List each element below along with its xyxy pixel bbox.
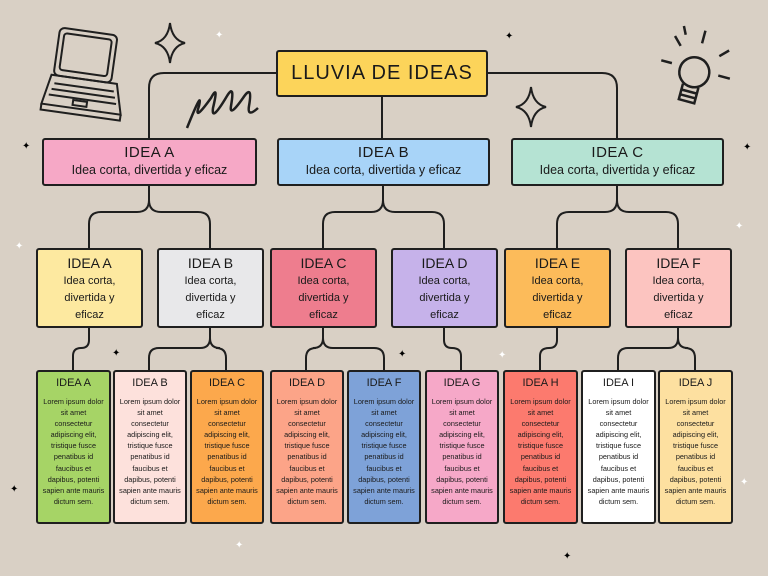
level2: B: IDEA B xyxy=(188,255,233,271)
level3: F: penatibus id xyxy=(364,452,404,461)
decorative stars: ✦ xyxy=(22,141,30,152)
level3: G: consectetur xyxy=(443,419,481,428)
level3: G: penatibus id xyxy=(442,452,482,461)
decorative stars: ✦ xyxy=(505,31,513,42)
decorative stars: ✦ xyxy=(498,350,506,361)
level3: H: sapien ante mauris xyxy=(510,486,571,495)
level3: C: dictum sem. xyxy=(207,497,247,506)
level3: A: faucibus et xyxy=(56,464,91,473)
level3: A: IDEA A xyxy=(56,377,91,389)
level2: B xyxy=(157,248,264,328)
level3: J: sapien ante mauris xyxy=(665,486,726,495)
level3: H: tristique fusce xyxy=(518,441,563,450)
level2: D: Idea corta, xyxy=(418,275,470,287)
level3: B: adipiscing elit, xyxy=(127,430,173,439)
level3: F: tristique fusce xyxy=(361,441,407,450)
icon: lightbulb xyxy=(661,26,730,105)
decorative stars: ✦ xyxy=(215,30,223,41)
level3: G: IDEA G xyxy=(444,377,480,389)
level1: IDEA C xyxy=(511,138,724,186)
level3: F xyxy=(347,370,421,524)
level3: B: consectetur xyxy=(131,419,169,428)
level3: F: Lorem ipsum dolor xyxy=(354,397,414,406)
decorative stars: ✦ xyxy=(235,540,243,551)
level3: D: consectetur xyxy=(288,419,326,428)
level2: A: IDEA A xyxy=(67,255,112,271)
level2: D xyxy=(391,248,498,328)
level3: D xyxy=(270,370,344,524)
level3: F: sit amet xyxy=(371,408,397,417)
level3: G: dapibus, potenti xyxy=(436,475,488,484)
icon: sparkle xyxy=(154,22,186,64)
decorative stars: ✦ xyxy=(563,551,571,562)
level3: H: penatibus id xyxy=(521,452,560,461)
level3: I: dapibus, potenti xyxy=(593,475,644,484)
level3: I: penatibus id xyxy=(599,452,638,461)
level3: H: consectetur xyxy=(522,419,559,428)
level3: J: adipiscing elit, xyxy=(673,430,718,439)
level3: I: sapien ante mauris xyxy=(588,486,649,495)
level2: C xyxy=(270,248,377,328)
level2: B: divertida y xyxy=(185,292,236,304)
level3: F: sapien ante mauris xyxy=(353,486,415,495)
level3: I: Lorem ipsum dolor xyxy=(588,397,649,406)
level3: A xyxy=(36,370,111,524)
level2: C: Idea corta, xyxy=(298,275,349,287)
level2: E xyxy=(504,248,611,328)
level1: IDEA A: IDEA A xyxy=(124,144,175,161)
level3: J: Lorem ipsum dolor xyxy=(665,397,726,406)
level1: IDEA B xyxy=(277,138,490,186)
level3: C: dapibus, potenti xyxy=(201,475,253,484)
level3: F: dictum sem. xyxy=(364,497,404,506)
level3: A: sapien ante mauris xyxy=(43,486,104,495)
level3: I: IDEA I xyxy=(603,377,634,389)
level3: H: IDEA H xyxy=(522,377,559,389)
level3: I: adipiscing elit, xyxy=(596,430,641,439)
level2: F: IDEA F xyxy=(656,255,701,271)
level3: A: penatibus id xyxy=(54,452,93,461)
level3: I: sit amet xyxy=(606,408,631,417)
level3: H: Lorem ipsum dolor xyxy=(510,397,571,406)
level3: C: faucibus et xyxy=(209,464,245,473)
level2: E: Idea corta, xyxy=(532,275,583,287)
level3: I: tristique fusce xyxy=(596,441,641,450)
level3: A: sit amet xyxy=(61,408,86,417)
level3: C: sapien ante mauris xyxy=(196,486,258,495)
level3: G: tristique fusce xyxy=(439,441,485,450)
level1: IDEA C: Idea corta, divertida y eficaz xyxy=(540,163,695,177)
level3: F: faucibus et xyxy=(366,464,402,473)
level3: A: dapibus, potenti xyxy=(48,475,99,484)
decorative stars: ✦ xyxy=(112,348,120,359)
level3: C: tristique fusce xyxy=(204,441,250,450)
icon: laptop xyxy=(40,27,122,122)
level3: B: penatibus id xyxy=(130,452,170,461)
level3: D: dapibus, potenti xyxy=(281,475,333,484)
level3: D: IDEA D xyxy=(289,377,325,389)
level3: I: consectetur xyxy=(600,419,637,428)
level3: J: dapibus, potenti xyxy=(670,475,721,484)
level3: G xyxy=(425,370,499,524)
level1: IDEA A: Idea corta, divertida y eficaz xyxy=(72,163,227,177)
level3: G: adipiscing elit, xyxy=(439,430,485,439)
level2: D: IDEA D xyxy=(422,255,467,271)
level2: B: Idea corta, xyxy=(184,275,236,287)
level3: J: sit amet xyxy=(683,408,708,417)
level3: G: Lorem ipsum dolor xyxy=(432,397,492,406)
level3: G: sit amet xyxy=(449,408,475,417)
level3: C: sit amet xyxy=(214,408,240,417)
level1: IDEA C: IDEA C xyxy=(591,144,644,161)
level3: D: penatibus id xyxy=(287,452,327,461)
level3: A: consectetur xyxy=(55,419,92,428)
level3: D: tristique fusce xyxy=(284,441,330,450)
level3: C: Lorem ipsum dolor xyxy=(197,397,257,406)
level3: J xyxy=(658,370,733,524)
level3: B: sit amet xyxy=(137,408,163,417)
level2: D: divertida y xyxy=(419,292,470,304)
icon: squiggle xyxy=(186,90,259,128)
level3: I xyxy=(581,370,656,524)
level3: D: adipiscing elit, xyxy=(284,430,330,439)
level3: B: sapien ante mauris xyxy=(119,486,181,495)
decorative stars: ✦ xyxy=(743,142,751,153)
level2: F xyxy=(625,248,732,328)
level2: F: divertida y xyxy=(653,292,704,304)
level3: J: consectetur xyxy=(677,419,714,428)
level3: C xyxy=(190,370,264,524)
level3: D: faucibus et xyxy=(289,464,325,473)
level3: J: faucibus et xyxy=(678,464,713,473)
level2: C: IDEA C xyxy=(301,255,346,271)
icon: sparkle 2 xyxy=(516,86,546,128)
decorative stars: ✦ xyxy=(15,241,23,252)
level2: D: eficaz xyxy=(430,309,459,321)
title xyxy=(276,50,488,97)
title: LLUVIA DE IDEAS xyxy=(291,62,473,84)
level3: A: dictum sem. xyxy=(54,497,93,506)
level3: B: faucibus et xyxy=(132,464,168,473)
level3: I: faucibus et xyxy=(601,464,636,473)
level3: A: Lorem ipsum dolor xyxy=(43,397,104,406)
level3: B: IDEA B xyxy=(132,377,168,389)
level2: B: eficaz xyxy=(196,309,225,321)
level1: IDEA B: Idea corta, divertida y eficaz xyxy=(306,163,461,177)
level3: H xyxy=(503,370,578,524)
level3: F: IDEA F xyxy=(367,377,401,389)
level3: B xyxy=(113,370,187,524)
level3: J: IDEA J xyxy=(679,377,712,389)
level2: E: IDEA E xyxy=(535,255,580,271)
level1: IDEA B: IDEA B xyxy=(358,144,409,161)
level2: E: divertida y xyxy=(532,292,583,304)
decorative stars: ✦ xyxy=(10,484,18,495)
level3: B: Lorem ipsum dolor xyxy=(120,397,180,406)
level3: H: sit amet xyxy=(528,408,553,417)
level3: C: penatibus id xyxy=(207,452,247,461)
level3: H: dictum sem. xyxy=(521,497,560,506)
decorative stars: ✦ xyxy=(740,477,748,488)
level3: C: consectetur xyxy=(208,419,246,428)
level3: D: sapien ante mauris xyxy=(276,486,338,495)
level2: C: divertida y xyxy=(298,292,349,304)
level3: F: dapibus, potenti xyxy=(358,475,410,484)
level3: G: dictum sem. xyxy=(442,497,482,506)
level3: C: IDEA C xyxy=(209,377,245,389)
level3: F: consectetur xyxy=(365,419,403,428)
level3: I: dictum sem. xyxy=(599,497,638,506)
level2: E: eficaz xyxy=(543,309,572,321)
level3: B: dictum sem. xyxy=(130,497,170,506)
level3: J: dictum sem. xyxy=(676,497,715,506)
level3: D: dictum sem. xyxy=(287,497,327,506)
level3: G: sapien ante mauris xyxy=(431,486,493,495)
level3: H: dapibus, potenti xyxy=(515,475,566,484)
level3: D: sit amet xyxy=(294,408,320,417)
level3: C: adipiscing elit, xyxy=(204,430,250,439)
level3: A: adipiscing elit, xyxy=(51,430,96,439)
level3: B: tristique fusce xyxy=(127,441,173,450)
level2: A: eficaz xyxy=(75,309,104,321)
level3: G: faucibus et xyxy=(444,464,480,473)
level2: F: Idea corta, xyxy=(652,275,704,287)
level3: H: adipiscing elit, xyxy=(518,430,563,439)
level2: A xyxy=(36,248,143,328)
level2: A: divertida y xyxy=(64,292,115,304)
decorative stars: ✦ xyxy=(398,349,406,360)
level2: C: eficaz xyxy=(309,309,338,321)
level3: H: faucibus et xyxy=(523,464,558,473)
level3: D: Lorem ipsum dolor xyxy=(277,397,337,406)
level3: B: dapibus, potenti xyxy=(124,475,176,484)
level3: F: adipiscing elit, xyxy=(361,430,407,439)
level3: J: tristique fusce xyxy=(673,441,718,450)
level1: IDEA A xyxy=(42,138,257,186)
level3: A: tristique fusce xyxy=(51,441,96,450)
decorative stars: ✦ xyxy=(735,221,743,232)
level3: J: penatibus id xyxy=(676,452,715,461)
level2: F: eficaz xyxy=(664,309,693,321)
level2: A: Idea corta, xyxy=(64,275,115,287)
